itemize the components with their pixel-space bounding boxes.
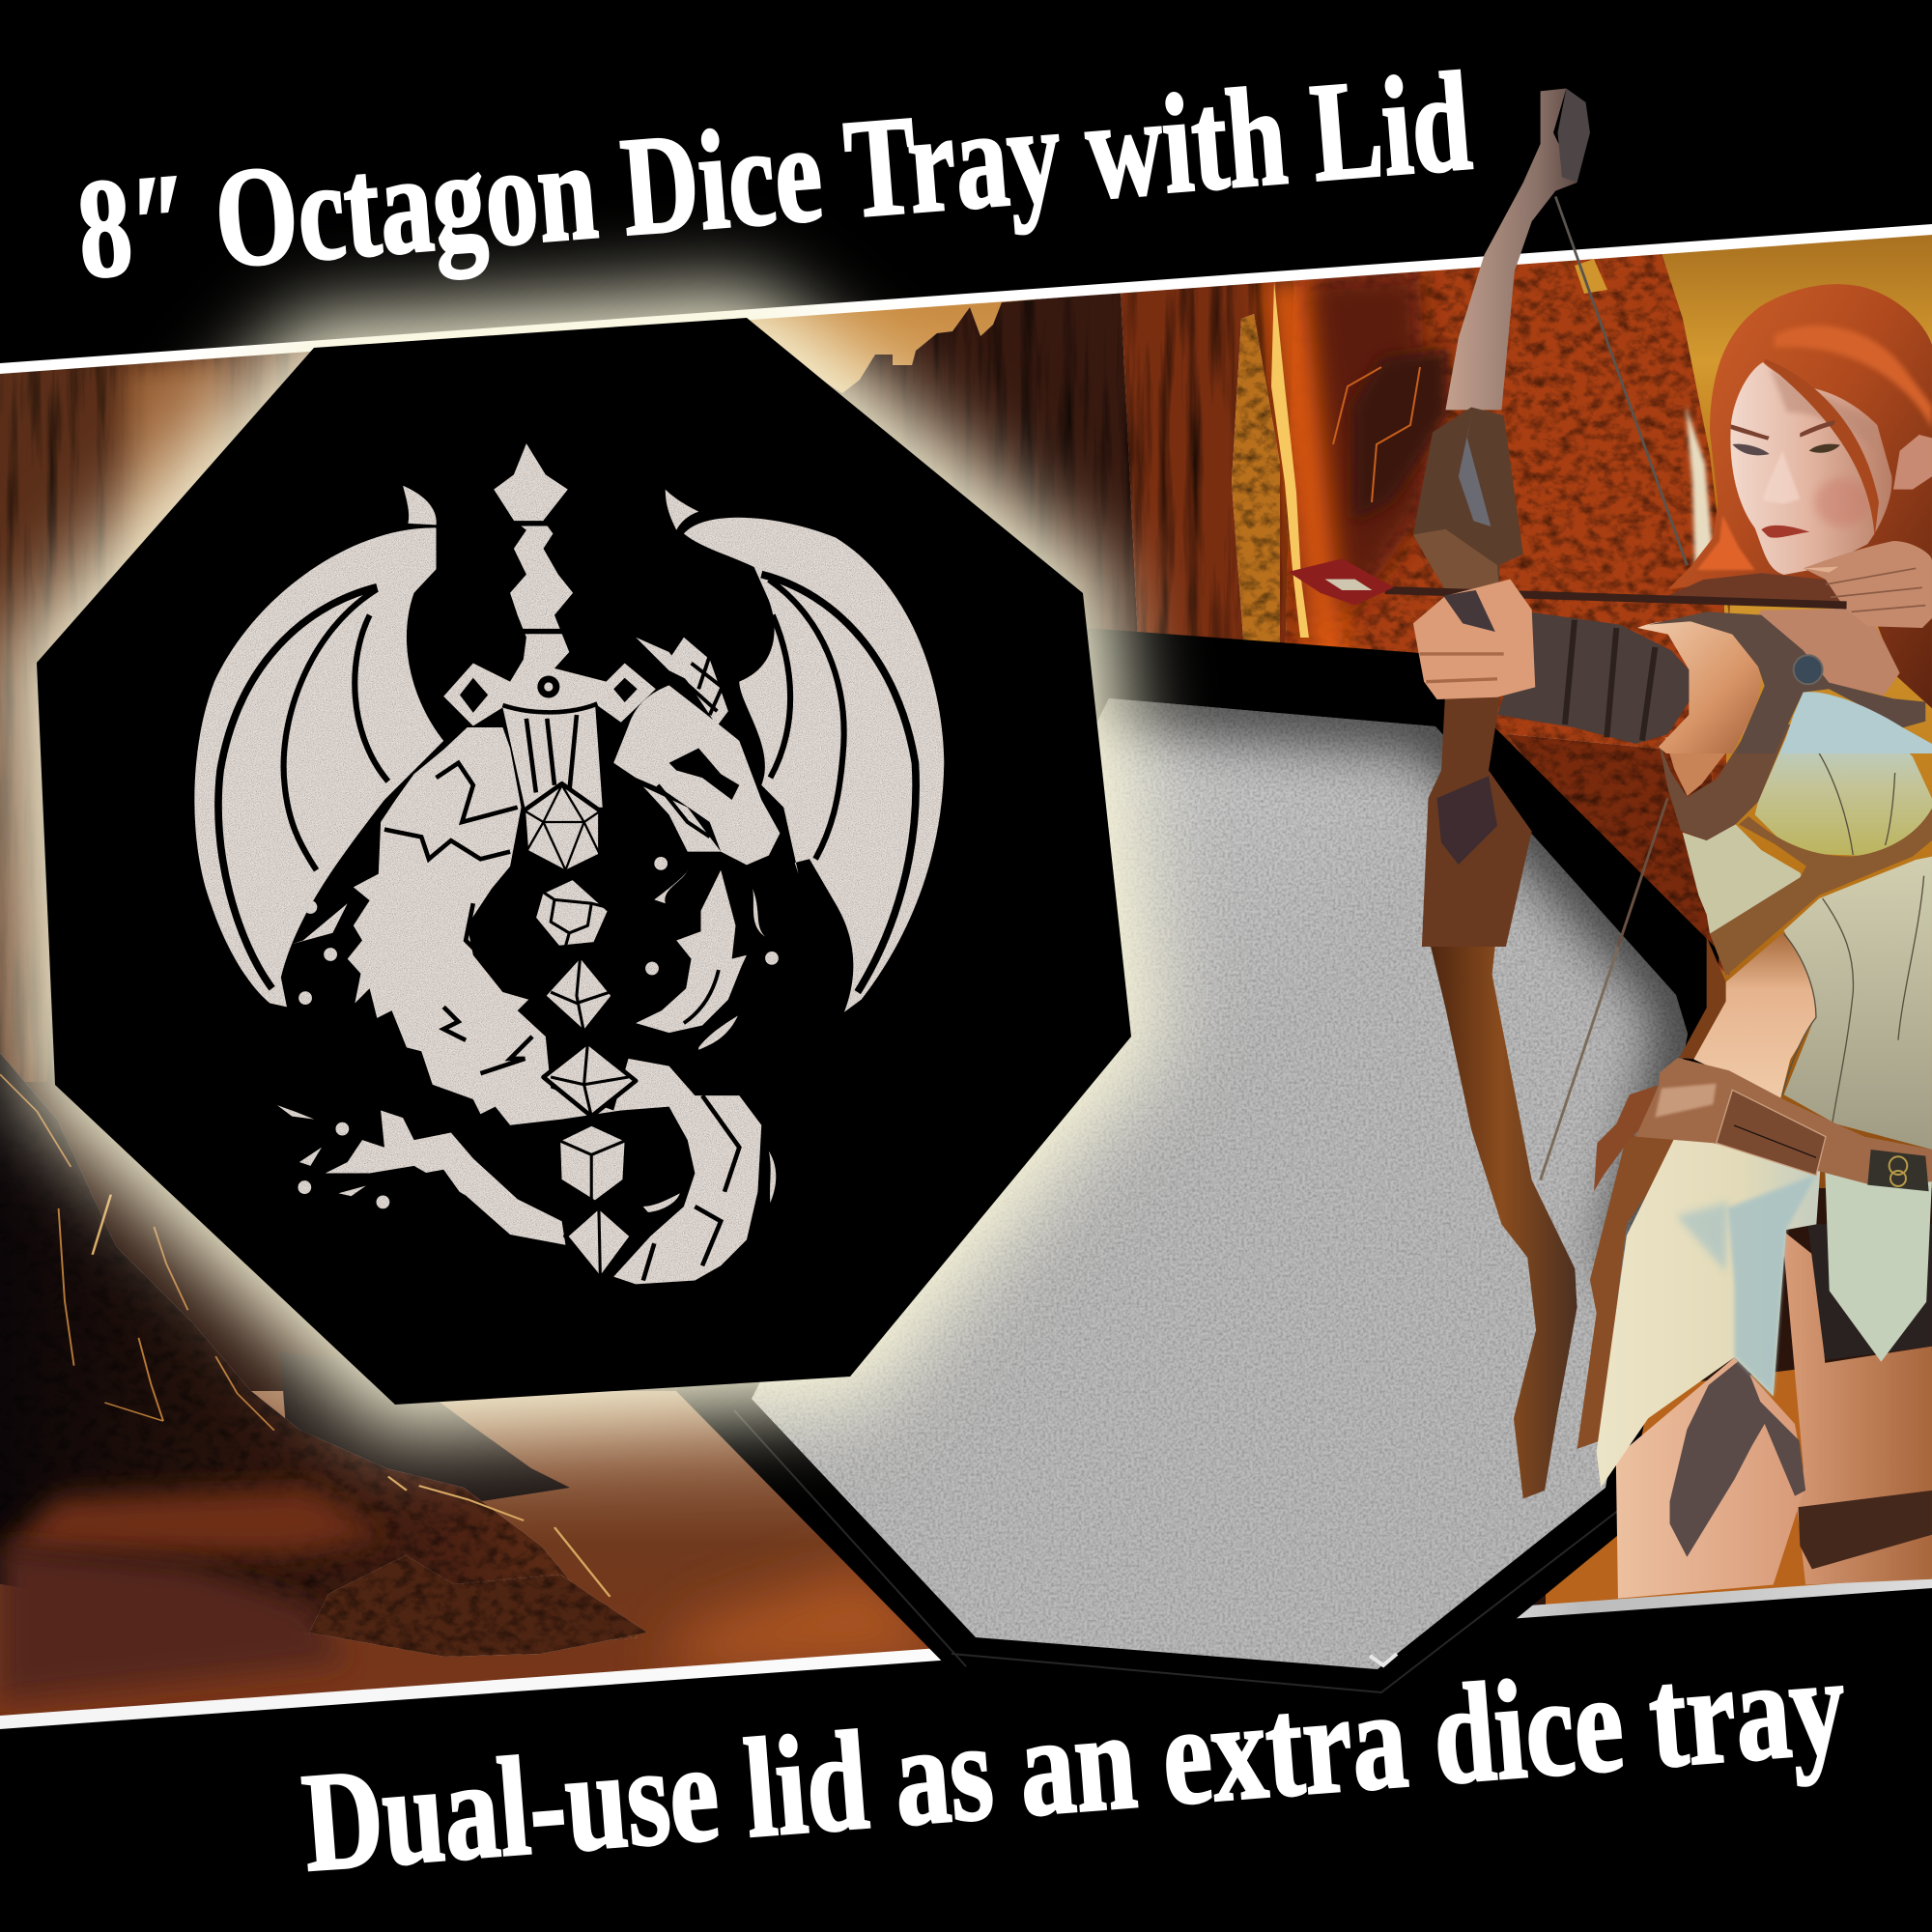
main rock mass [0, 1053, 638, 1654]
bowstring lower [1618, 798, 1667, 947]
pale rock edge [1686, 406, 1712, 599]
icon: hip strap and thigh holster [1670, 1357, 1805, 1557]
dice tray with felt [676, 628, 1719, 1718]
rock reddish band [0, 1488, 386, 1555]
icon: stack of polyhedral dice [524, 783, 636, 1279]
left cliff light [110, 357, 238, 562]
foreground rock pile [309, 1555, 647, 1657]
icon: thigh strap [1799, 1491, 1932, 1569]
icon: arrow head [1288, 558, 1394, 605]
floor under the archer [1546, 1352, 1932, 1623]
white edge line of top banner [0, 224, 1932, 374]
icon: forehead shadow [1770, 367, 1877, 451]
rock cracks [1333, 367, 1420, 502]
rock cracks bottom left [0, 1074, 610, 1597]
icon: left wing [194, 486, 443, 1007]
tray felt [752, 698, 1688, 1669]
icon: bracer wrap lines [1565, 620, 1655, 741]
icon: armpit strap [1659, 724, 1790, 840]
octagon lid [37, 318, 1131, 1405]
icon: shoulder strap [1649, 611, 1925, 753]
icon: under-bust strap [1710, 809, 1932, 976]
icon: lower riser slate panel [1436, 776, 1497, 865]
icon: leather tassets [1577, 1136, 1687, 1449]
panel: bow and arrow [1288, 88, 1847, 947]
icon: belt highlight [1655, 1084, 1717, 1118]
icon: dragon body [277, 727, 776, 1284]
icon: upper arm lower part [1664, 724, 1751, 796]
icon: grip metal plate [1459, 415, 1491, 526]
icon: side panel [1683, 824, 1804, 934]
orange rock right of lava [1285, 242, 1729, 976]
icon: bow grip wrap [1413, 408, 1523, 596]
icon: dragon head [613, 638, 780, 865]
icon: belt [1635, 1058, 1932, 1185]
icon: eyebrows [1731, 420, 1835, 440]
icon: bowstring collar [1668, 573, 1843, 607]
panel: archer torso [1594, 724, 1932, 1191]
icon: hair left strand light [1697, 515, 1755, 570]
background base [25, 280, 1932, 1605]
ground plain [0, 1391, 966, 1729]
icon: bow-hand finger lines [1420, 654, 1504, 682]
icon: armor seams [1782, 731, 1924, 1123]
icon: strap button [1794, 655, 1823, 684]
peach sky at centre [750, 299, 1036, 393]
frame seams [734, 1410, 1623, 1692]
shadowed rock recess [1294, 270, 1430, 638]
icon: ear [1893, 435, 1932, 490]
icon: bow grip wood [1422, 687, 1532, 947]
icon: arrow shaft [1385, 590, 1847, 605]
icon: bowstring lower part [1541, 869, 1644, 1179]
icon: flame from mouth [636, 857, 779, 1050]
panel: fantasy canyon background band [0, 222, 1932, 1729]
icon: hand nail [1804, 567, 1838, 573]
icon: finger lines [1826, 568, 1925, 611]
icon: drawing hand [1804, 541, 1932, 628]
sky notches in the right rock [1575, 259, 1607, 294]
icon: bow top tip [1557, 88, 1590, 183]
icon: waist [1693, 932, 1816, 1098]
icon: chest armor [1755, 727, 1932, 857]
icon: hair strand over face [1765, 359, 1879, 538]
icon: chest light blue [1780, 692, 1932, 753]
foreground ledge [0, 1546, 348, 1700]
felt edge shadow [1063, 691, 1690, 1275]
icon: neck [1758, 609, 1900, 696]
left distant cliff [0, 338, 319, 1082]
icon: pouch [1594, 1085, 1659, 1191]
panel: archer legs and skirt [1425, 869, 1932, 1599]
deep rock shadow [1352, 348, 1449, 522]
icon: grip band [1413, 529, 1499, 596]
ground orange glow [657, 1565, 966, 1676]
icon: bow hand [1413, 579, 1535, 699]
icon: belt pocket [1717, 1090, 1826, 1176]
lava stream [1271, 282, 1309, 638]
icon: shorts [1807, 1224, 1932, 1360]
archer woman and bow [1288, 88, 1932, 1599]
icon: cheek blush [1814, 478, 1869, 526]
icon: eyes [1732, 444, 1840, 455]
white edge line of bottom banner [0, 1577, 1932, 1729]
icon: left leg [1616, 1357, 1805, 1599]
icon: skirt fold shade [1676, 1202, 1728, 1271]
icon: lips [1761, 526, 1809, 538]
icon: hair [1668, 284, 1932, 708]
icon: bow lower limb [1425, 923, 1577, 1498]
icon: belly armor [1784, 857, 1932, 1150]
icon: bracer [1497, 612, 1689, 744]
dragon, sword and dice emblem [194, 443, 944, 1284]
icon: pocket slit [1734, 1125, 1816, 1157]
dark cliff centre [827, 294, 1134, 615]
icon: sword [443, 443, 656, 808]
icon: belt buckle [1867, 1150, 1929, 1191]
dark red rock beside the lava [1121, 282, 1289, 643]
bright rock patches [1232, 314, 1280, 676]
sky right of the rock [1642, 222, 1932, 618]
panel: archer head and shoulders [1497, 284, 1932, 753]
icon: bow upper limb [1445, 88, 1577, 410]
icon: arm skin [1637, 621, 1761, 753]
icon: face [1730, 362, 1891, 575]
icon: back strap [1679, 937, 1726, 1060]
icon: hair shine [1775, 326, 1932, 428]
lava glow [1265, 276, 1348, 676]
icon: skirt [1597, 1130, 1821, 1488]
icon: armor front flap [1825, 1169, 1932, 1362]
lower cliff behind arm [1507, 734, 1729, 976]
icon: arrow inner [1324, 579, 1373, 590]
lid glow [37, 318, 1131, 1405]
sky [1720, 502, 1932, 1188]
bowstring upper [1555, 196, 1687, 565]
title: 8 inch octagon dice tray with lid: 8″ Octagon Dice Tray with Lid [72, 43, 1476, 308]
icon: thumb grip [1443, 590, 1495, 632]
icon: right wing [666, 490, 944, 1012]
icon: nose shadow [1763, 451, 1800, 504]
tray frame [676, 628, 1719, 1718]
felt corner highlight [1370, 1654, 1397, 1665]
icon: right leg [1782, 1230, 1932, 1584]
distant dark ridge [280, 1352, 570, 1507]
icon: skirt blue strip [1728, 1175, 1816, 1396]
